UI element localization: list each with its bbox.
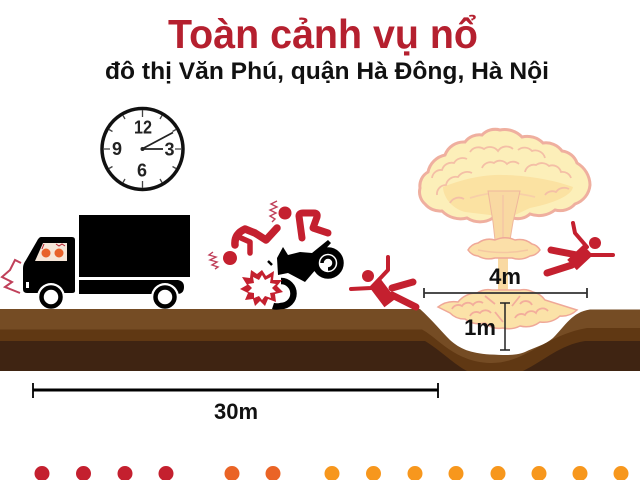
icon: thrown person two: [278, 206, 328, 238]
dimension: 4m: 4m: [489, 264, 521, 289]
icon: clock: [102, 108, 183, 190]
icon: mushroom cloud: [420, 129, 590, 329]
icon: motorcycle: [268, 240, 340, 306]
dimension: 30m: [33, 383, 438, 424]
icon: clock: 3: [164, 140, 175, 160]
icon: crash burst: [240, 270, 283, 306]
dimension: 4m: [424, 264, 587, 298]
icon: thrown person one: [223, 228, 277, 265]
dimension: 30m: 30m: [214, 399, 258, 424]
timeline dots: [34, 466, 628, 480]
icon: clock: 9: [112, 139, 122, 159]
icon: head impact marks: [209, 201, 277, 269]
icon: truck: [23, 215, 190, 311]
icon: falling person left: [351, 257, 416, 307]
subtitle: đô thị Văn Phú, quận Hà Đông, Hà Nội: [105, 58, 549, 85]
dimension: 1m: [464, 303, 510, 350]
icon: clock: 6: [137, 160, 147, 180]
ground: [0, 309, 640, 371]
icon: truck impact burst: [2, 260, 21, 293]
icon: clock: 12: [134, 118, 152, 138]
icon: falling person right: [547, 223, 613, 273]
title: Toàn cảnh vụ nổ: [168, 11, 478, 57]
dimension: 1m: 1m: [464, 315, 496, 340]
